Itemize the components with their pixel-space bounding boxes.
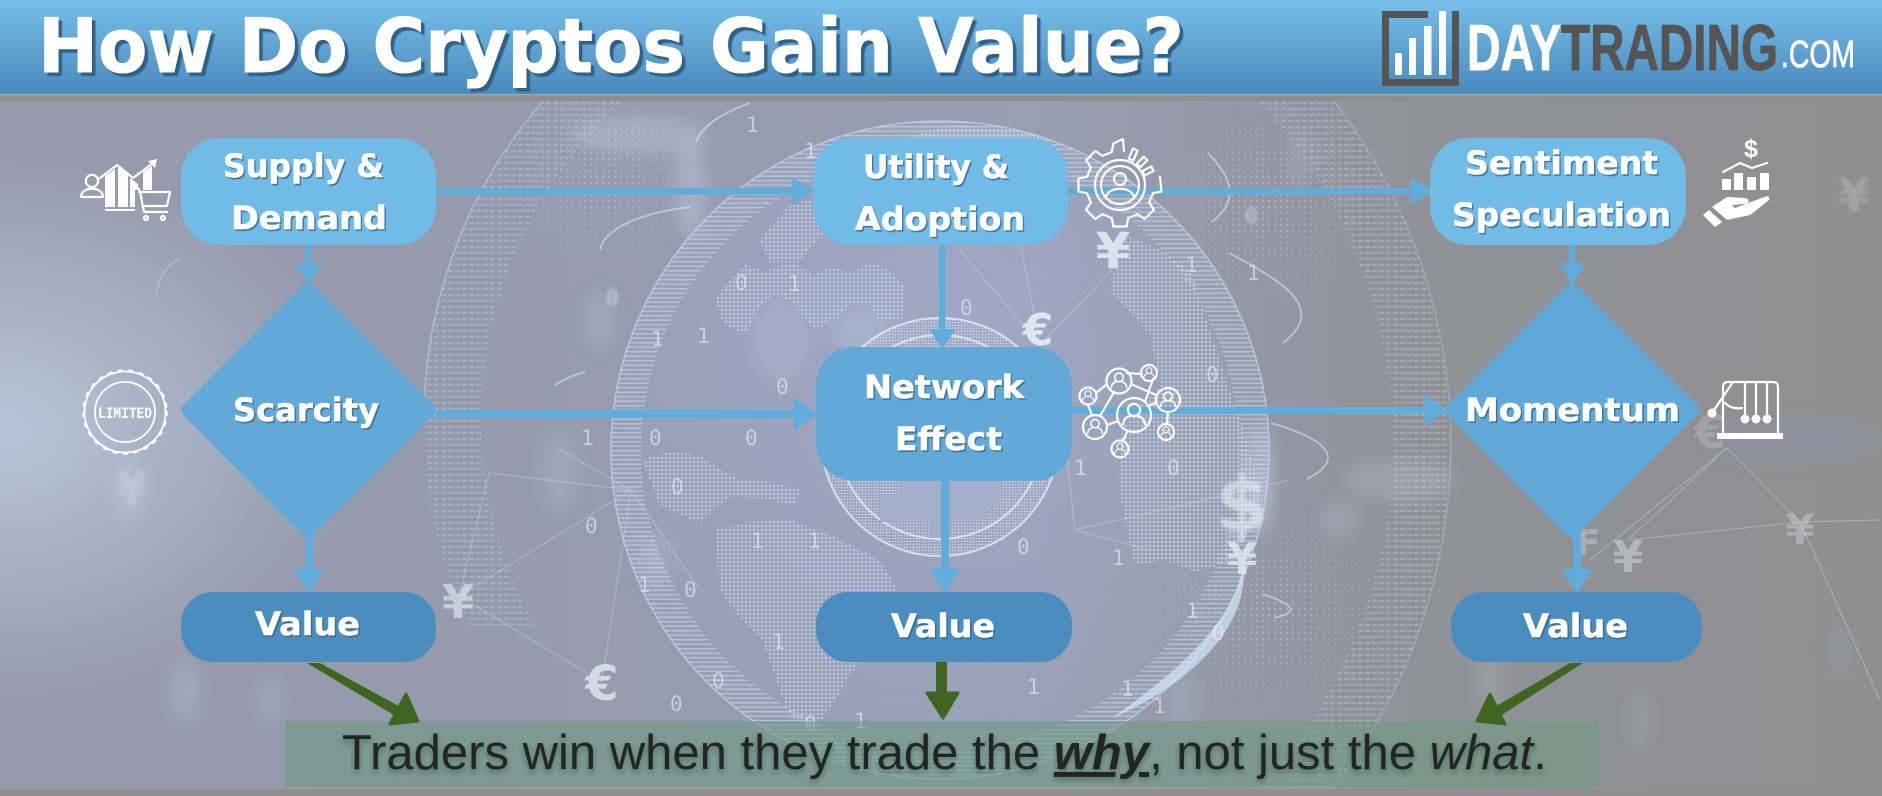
binary digits: 0 [649,426,662,450]
logo: DayTrading.com: DAY [1467,11,1561,84]
binary digits: 0 [712,669,725,693]
diamond: momentum: Momentum [1465,391,1680,429]
binary digits: 1 [1186,599,1199,623]
binary digits: 1 [804,139,817,163]
currency symbols: € [1693,405,1726,459]
icon: gear with person [1078,139,1162,226]
binary digits: 0 [671,475,684,499]
title: How Do Cryptos Gain Value? [38,2,1184,90]
binary digits: 0 [670,692,683,716]
currency symbols: ¥ [116,462,148,516]
binary digits: 0 [1017,535,1030,559]
binary digits: 0 [585,514,598,538]
bottom grey strip [0,789,1882,796]
arrow: scarcity to network [436,400,816,428]
binary digits: 1 [772,630,785,654]
currency symbols: ¥ [1838,169,1870,223]
continents (dotted) [642,125,1262,730]
binary digits: 1 [651,327,664,351]
binary digits: 1 [1153,694,1166,718]
binary digits: 1 [581,426,594,450]
binary digits: 0 [735,271,748,295]
icon: hand with chart and dollar: $ [1744,135,1758,163]
icon: supply chart, person and cart [81,159,170,220]
arrow: sentiment to momentum [1561,228,1584,283]
box: sentiment speculation [1430,138,1686,245]
box: sentiment speculation: Speculation [1452,196,1671,234]
diamond: scarcity: Scarcity [233,391,379,429]
currency symbols: ¥ [1096,222,1131,280]
box: utility and adoption: Utility & [863,148,1009,186]
box: supply and demand: Supply & [223,147,384,185]
currency symbols: € [584,656,619,712]
binary digits: 0 [684,578,697,602]
green arrow: middle value to takeaway [927,662,958,718]
arrow: momentum to value [1563,530,1591,592]
binary digits: 0 [1212,621,1225,645]
currency symbols: ₣ [1573,523,1599,564]
currency symbols: ¥ [1613,532,1644,583]
currency symbols: € [1022,305,1053,356]
green arrow: left value to takeaway [307,663,418,724]
diamond: scarcity [189,291,428,530]
currency symbols: ¥ [442,575,474,629]
binary digits: 1 [1247,261,1260,285]
network lines and arcs [459,240,1880,700]
binary digits: 0 [1167,456,1180,480]
box: value middle: Value [891,607,995,645]
logo: DayTrading.com: .COM [1781,34,1855,76]
box: value left [181,592,436,662]
binary digits: 1 [1112,546,1125,570]
icon: newton's cradle [1708,382,1783,439]
icon: hand with chart and dollar [1703,135,1769,227]
logo: DayTrading.com [1386,11,1855,84]
icon: people network [1080,365,1180,458]
arrow: supply to utility [436,179,813,203]
green arrow: right value to takeaway [1477,663,1583,724]
binary digits: 1 [751,529,764,553]
binary digits: 0 [1245,204,1258,228]
binary digits: 1 [1121,677,1134,701]
binary digits: 1 [1027,675,1040,699]
header bar [0,0,1882,101]
binary digits: 1 [638,573,651,597]
binary digits [581,113,1260,736]
arrow: utility to sentiment [1068,179,1431,203]
arrow: network to value [931,478,959,592]
bottom takeaway band [285,721,1598,787]
inner globe [611,121,1269,779]
binary digits: 1 [746,113,759,137]
box: value right: Value [1523,607,1628,645]
binary digits: 1 [854,709,867,733]
box: supply and demand [181,138,436,245]
arrow: scarcity to value [295,530,323,592]
currency symbols: ¥ [1227,534,1258,585]
takeaway text: Traders win when they trade the why, not just the what. [342,726,1547,780]
outer hatched sphere [424,101,1451,789]
arrow: network to momentum [1072,396,1446,424]
binary digits: 0 [960,296,973,320]
box: network effect: Network [864,368,1025,406]
binary digits: 1 [697,324,710,348]
currency symbols [116,169,1870,712]
icon: limited seal: LIMITED [98,405,152,423]
box: value right [1451,592,1702,662]
box: utility and adoption [813,138,1068,245]
currency symbols: $ [1216,459,1268,548]
box: supply and demand: Demand [231,199,387,237]
logo: DayTrading.com: TRADING [1561,11,1778,84]
box: value left: Value [255,605,360,643]
box: value middle [816,592,1072,662]
binary digits: 0 [745,426,758,450]
diamond: momentum [1453,291,1692,530]
bitcoin coin [821,318,1059,556]
binary digits: 1 [1185,253,1198,277]
arrow: utility to network [931,245,954,347]
binary digits: 0 [776,375,789,399]
binary digits: 1 [1074,456,1087,480]
box: utility and adoption: Adoption [855,200,1025,238]
binary digits: 0 [606,286,619,310]
arrow: supply to scarcity [297,245,320,283]
binary digits: 1 [788,272,801,296]
box: network effect: Effect [895,420,1002,458]
currency symbols: ¥ [1785,505,1815,554]
box: sentiment speculation: Sentiment [1465,144,1658,182]
binary digits: 1 [808,529,821,553]
box: network effect [816,347,1072,481]
icon: limited seal [84,370,166,454]
binary digits: 0 [804,712,817,736]
binary digits: 0 [1206,363,1219,387]
